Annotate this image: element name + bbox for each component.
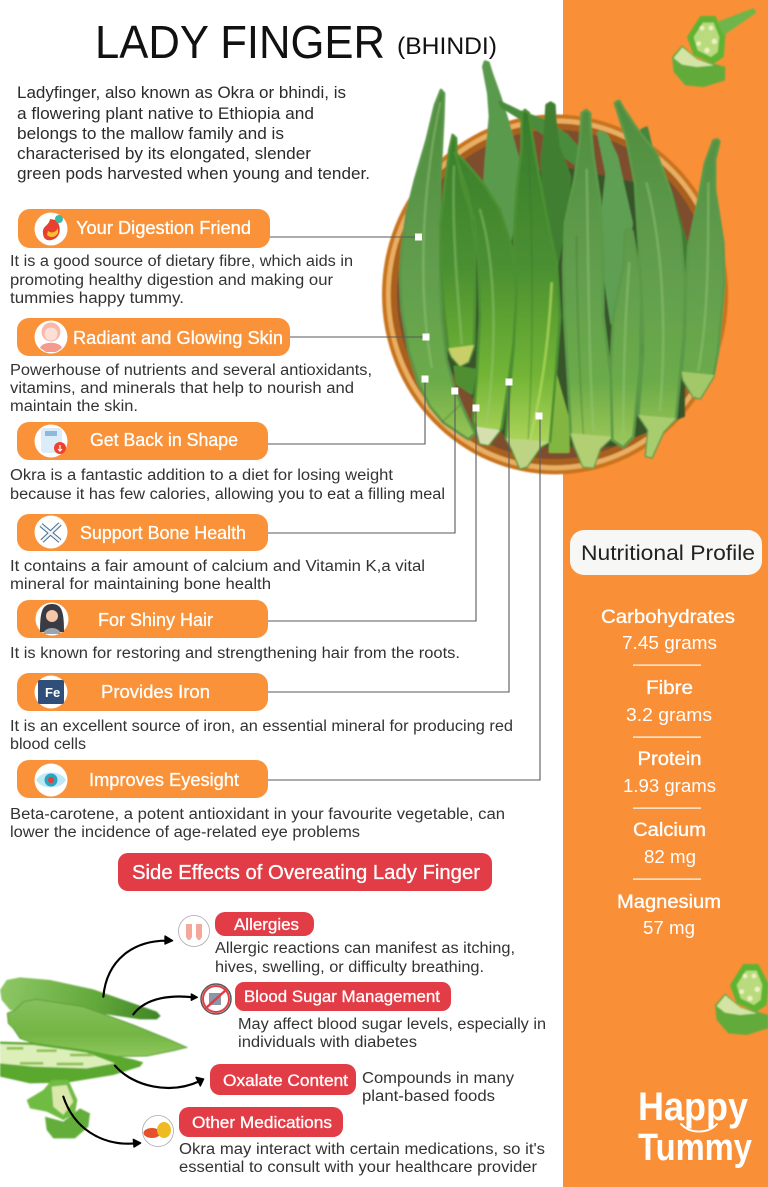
text: skin: maintain the skin. <box>10 398 138 415</box>
text: shape <box>10 467 445 503</box>
carbohydrates: 7.45 grams <box>622 633 717 653</box>
heading: nutritional profile <box>570 530 762 575</box>
pod left <box>400 90 475 439</box>
magnesium <box>617 892 721 938</box>
text: skin: Powerhouse of nutrients and several antioxidants, <box>10 362 372 379</box>
text: allergies <box>215 940 515 976</box>
text: hair: It is known for restoring and strengthening hair from the roots. <box>10 645 460 662</box>
logo: Happy Tummy: Happy <box>638 1085 749 1129</box>
text: digestion: It is a good source of dietary fibre, which aids in <box>10 253 353 270</box>
label: blood sugar <box>235 982 451 1011</box>
icon: face <box>40 322 62 352</box>
magnesium: 57 mg <box>643 918 695 938</box>
logo: Happy Tummy <box>638 1085 752 1169</box>
intro text block: green pods harvested when young and tender. <box>17 165 370 183</box>
text: allergies: hives, swelling, or difficulty breathing. <box>215 959 484 976</box>
text: digestion <box>10 253 353 307</box>
text: blood sugar: individuals with diabetes <box>238 1034 417 1051</box>
text: skin: vitamins, and minerals that help to nourish and <box>10 380 354 397</box>
icon: eye <box>36 772 66 788</box>
magnesium: Magnesium <box>617 892 721 913</box>
basket <box>382 114 728 474</box>
icon: bones <box>41 524 60 541</box>
label: oxalate: Oxalate Content <box>223 1072 348 1090</box>
icon: iron Fe: Fe <box>45 685 60 700</box>
text: allergies: Allergic reactions can manifest as itching, <box>215 940 515 957</box>
arrow: to allergies <box>103 936 173 997</box>
text: iron: blood cells <box>10 736 86 753</box>
icon: scale <box>41 428 66 454</box>
pod middle right <box>563 110 613 467</box>
arrow: to blood sugar <box>133 994 197 1014</box>
benefit: shape: Get Back in Shape <box>90 430 238 450</box>
panel: orange sidebar <box>563 0 768 1187</box>
label: allergies <box>215 912 314 936</box>
text: blood sugar: May affect blood sugar levels, especially in <box>238 1016 546 1033</box>
text: iron: It is an excellent source of iron, an essential mineral for producing red <box>10 718 513 735</box>
icon: allergies hands <box>178 916 210 946</box>
benefit: hair: For Shiny Hair <box>98 610 213 630</box>
label: blood sugar: Blood Sugar Management <box>244 988 440 1006</box>
text: bone: mineral for maintaining bone health <box>10 576 271 593</box>
text: digestion: tummies happy tummy. <box>10 290 184 307</box>
icon: no sugar <box>201 984 231 1014</box>
text: other medications: Okra may interact with certain medications, so it's <box>179 1141 545 1158</box>
protein: Protein <box>638 749 702 770</box>
benefit: bone <box>17 514 268 551</box>
icon: okra slices lower <box>715 964 768 1035</box>
fibre <box>626 678 712 725</box>
label: oxalate <box>210 1064 356 1095</box>
intro text block: Ladyfinger, also known as Okra or bhindi, is <box>17 84 346 102</box>
fibre: 3.2 grams <box>626 705 712 725</box>
intro text block: belongs to the mallow family and is <box>17 125 284 143</box>
title: (BHINDI) <box>397 33 497 60</box>
label: other medications: Other Medications <box>192 1114 332 1132</box>
text: oxalate: plant-based foods <box>362 1088 495 1105</box>
calcium: 82 mg <box>644 847 696 867</box>
back pods <box>455 62 688 452</box>
pod centre <box>506 110 560 468</box>
text: skin <box>10 362 372 415</box>
intro text block: a flowering plant native to Ethiopia and <box>17 105 314 123</box>
benefit: digestion <box>18 209 270 248</box>
arrow: to oxalate <box>115 1066 204 1088</box>
pod third <box>455 153 517 445</box>
calcium <box>633 820 706 867</box>
carbohydrates: Carbohydrates <box>601 607 735 628</box>
text: oxalate <box>362 1070 514 1105</box>
arrow: to medications <box>63 1097 141 1147</box>
icon: stomach <box>43 215 63 240</box>
text: shape: because it has few calories, allowing you to eat a filling meal <box>10 486 445 503</box>
icon: iron Fe <box>38 680 64 704</box>
pod front small <box>611 228 642 447</box>
benefit: iron <box>17 673 268 711</box>
carbohydrates <box>601 607 735 653</box>
benefit: digestion: Your Digestion Friend <box>76 218 251 238</box>
heading: side effects <box>118 853 492 891</box>
benefit: skin: Radiant and Glowing Skin <box>73 328 283 348</box>
protein: 1.93 grams <box>623 776 716 796</box>
fibre: Fibre <box>646 678 693 699</box>
pod second <box>441 135 475 366</box>
icon: okra slices top <box>672 8 756 87</box>
benefit: skin <box>17 318 290 356</box>
label: allergies: Allergies <box>234 916 299 934</box>
connector lines and dots <box>268 234 542 780</box>
label: other medications <box>179 1107 343 1137</box>
text: iron <box>10 718 513 753</box>
text: blood sugar <box>238 1016 546 1051</box>
text: other medications <box>179 1141 545 1176</box>
heading: side effects: Side Effects of Overeating Lady Finger <box>132 862 480 884</box>
okra illustration bottom left <box>0 936 204 1147</box>
icon: hair <box>40 604 64 634</box>
text: oxalate: Compounds in many <box>362 1070 514 1087</box>
text: other medications: essential to consult with your healthcare provider <box>179 1159 537 1176</box>
pod big right <box>615 101 685 457</box>
benefit: eyesight <box>17 760 268 798</box>
benefit: bone: Support Bone Health <box>80 523 246 543</box>
protein <box>623 749 716 796</box>
text: eyesight <box>10 806 505 841</box>
text: bone <box>10 558 425 593</box>
nutrition list <box>601 607 735 938</box>
icon: pills <box>142 1116 174 1146</box>
logo: Happy Tummy: Tummy <box>638 1127 752 1169</box>
okra basket photo <box>382 62 728 474</box>
text: eyesight: lower the incidence of age-related eye problems <box>10 824 360 841</box>
text: eyesight: Beta-carotene, a potent antioxidant in your favourite vegetable, can <box>10 806 505 823</box>
benefit: hair <box>17 600 268 638</box>
pod far right <box>682 139 724 398</box>
benefit: iron: Provides Iron <box>101 682 210 702</box>
text: shape: Okra is a fantastic addition to a diet for losing weight <box>10 467 394 484</box>
intro text block: characterised by its elongated, slender <box>17 145 312 163</box>
calcium: Calcium <box>633 820 706 841</box>
text: digestion: promoting healthy digestion and making our <box>10 272 333 289</box>
heading: nutritional profile: Nutritional Profile <box>581 542 755 565</box>
text: bone: It contains a fair amount of calcium and Vitamin K,a vital <box>10 558 425 575</box>
intro text block <box>17 84 370 183</box>
benefit: eyesight: Improves Eyesight <box>89 770 239 790</box>
okra pods and slice <box>0 977 187 1138</box>
title: LADY FINGER <box>95 16 385 68</box>
benefit: shape <box>17 422 268 460</box>
